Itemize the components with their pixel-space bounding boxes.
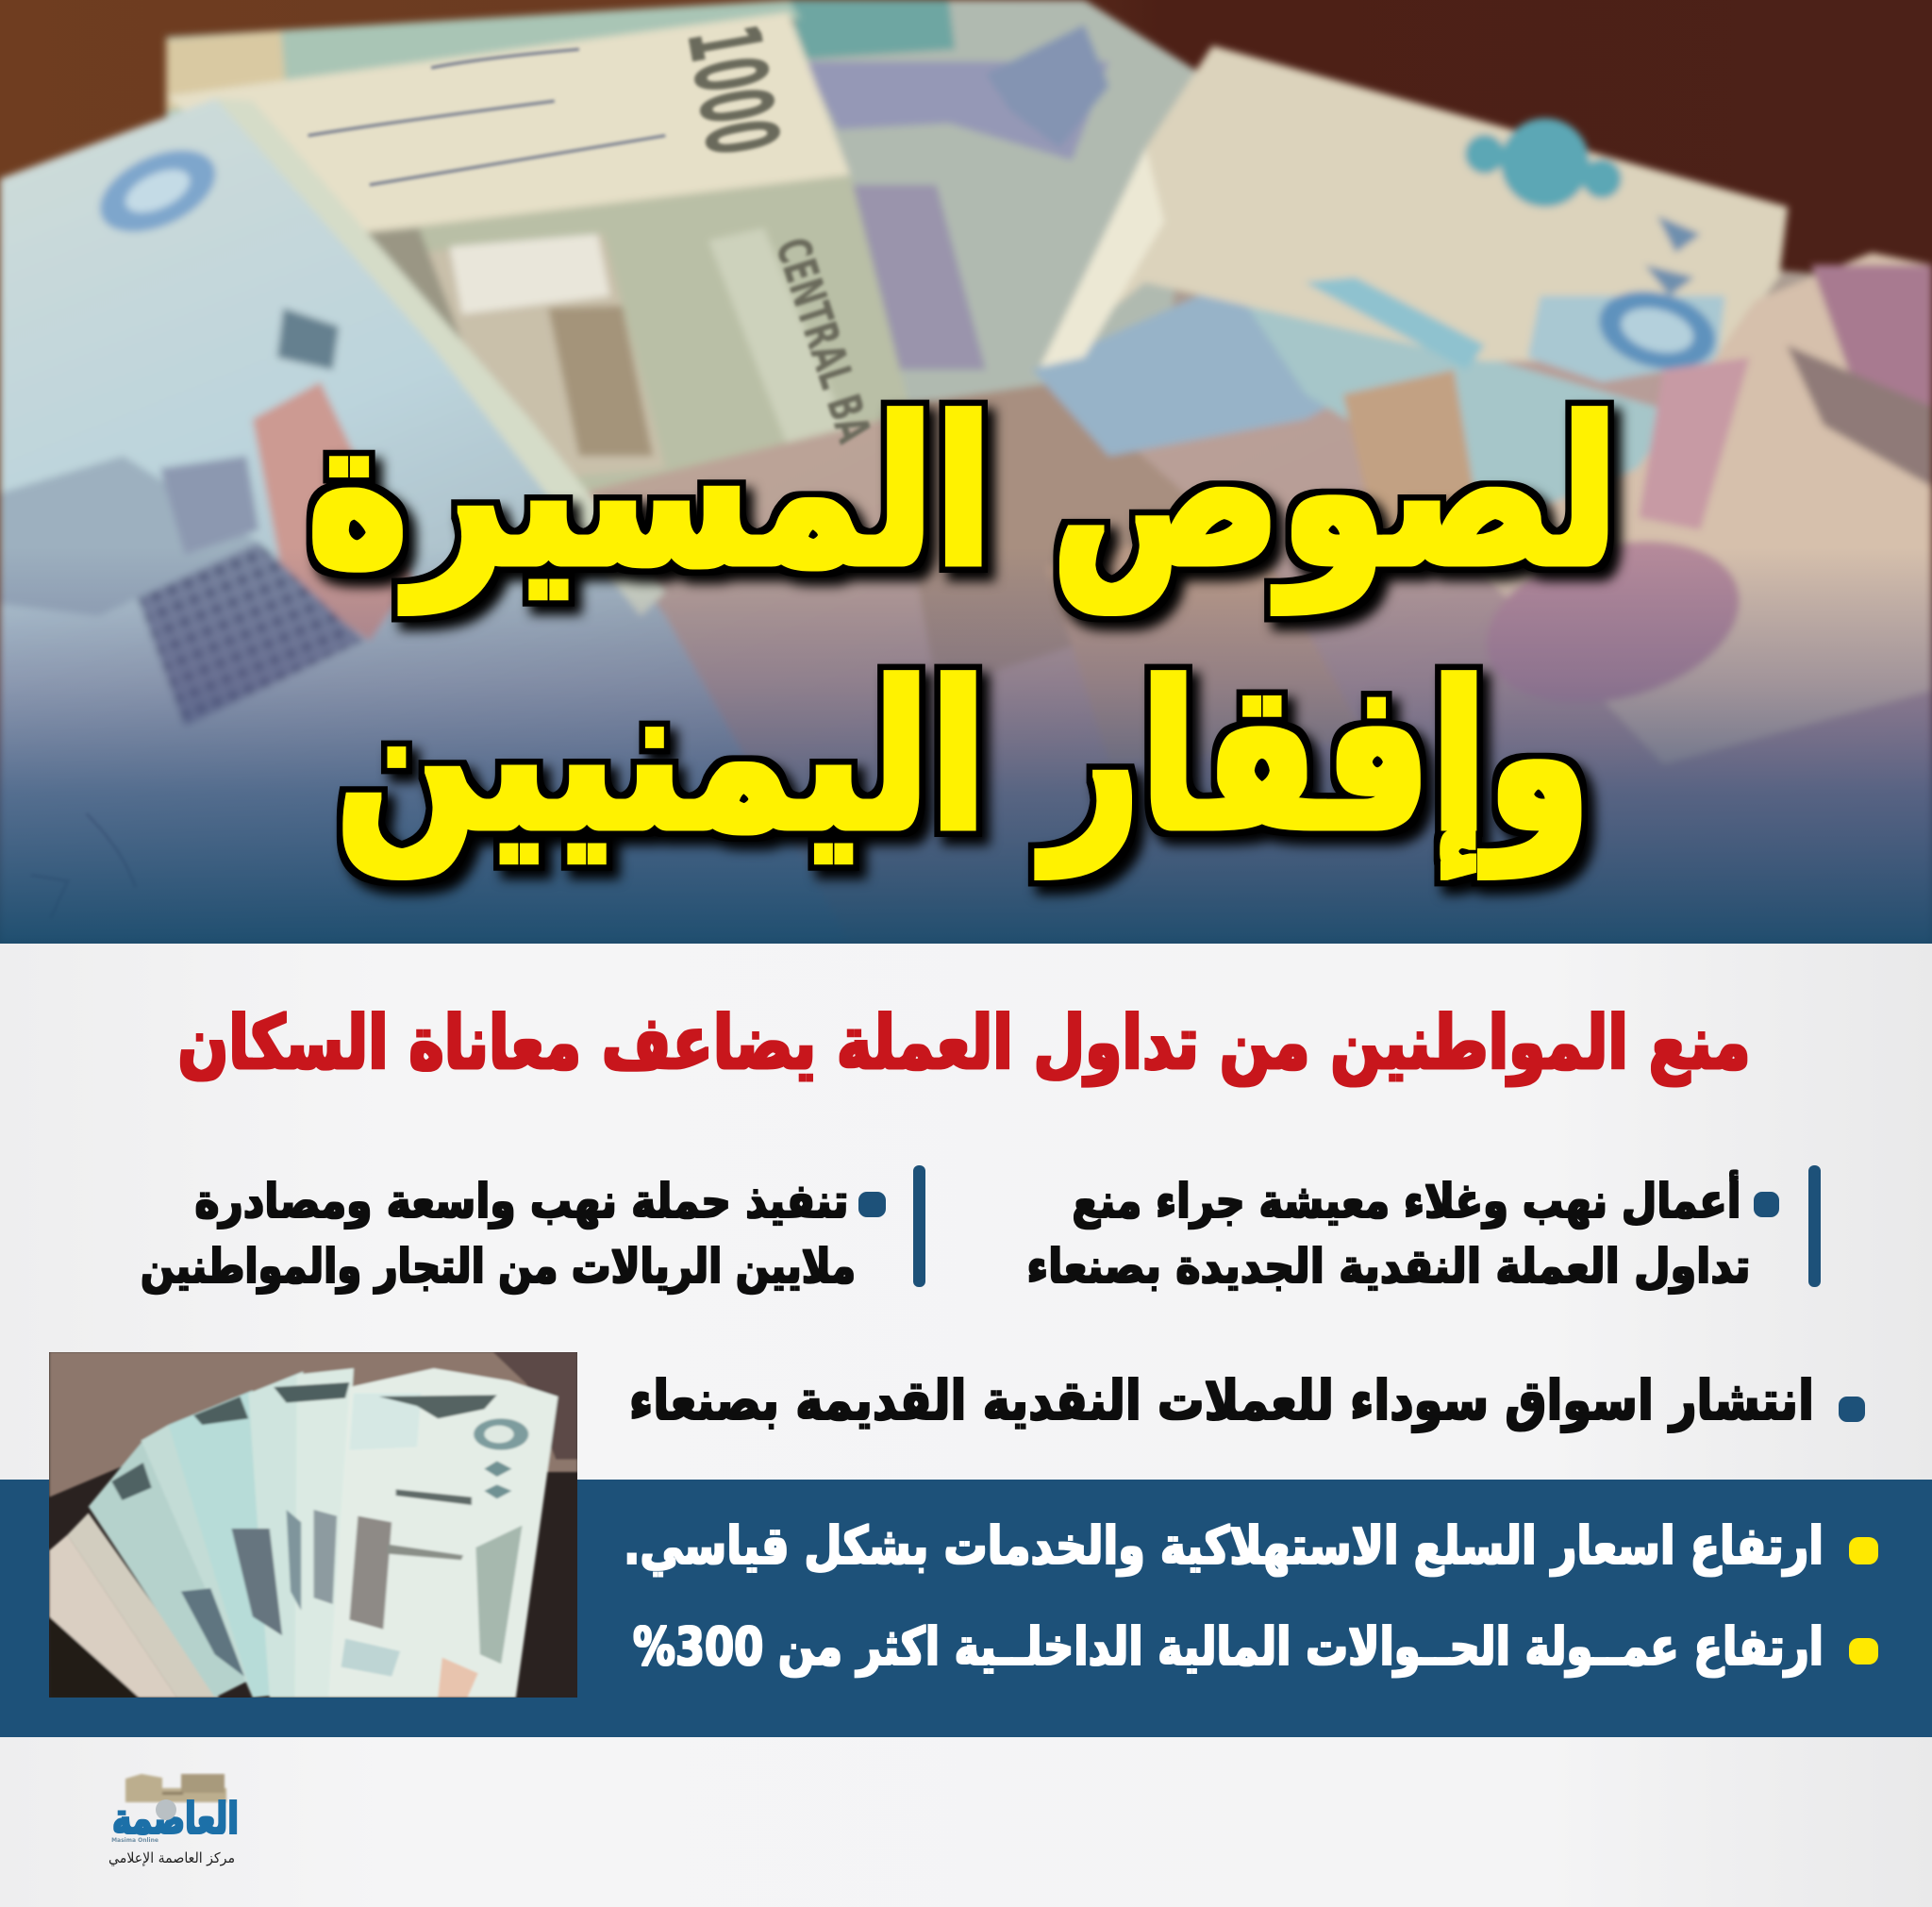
title [308, 375, 1619, 878]
blue band [0, 1480, 1932, 1737]
banknote: blue note [1034, 293, 1660, 527]
bullet item: looting and high cost of living [1026, 1165, 1821, 1295]
bullet: transfer fee [1849, 1638, 1878, 1664]
hero photo: banknotes [0, 0, 1932, 944]
title line 2: وإفقار اليمنيين [336, 639, 1591, 878]
title line 1: لصوص المسيرة [308, 375, 1619, 613]
handwriting on note [31, 49, 665, 918]
bullet item: confiscation campaign [141, 1165, 925, 1295]
bullet [1839, 1397, 1865, 1422]
banknote: top stripe [166, 0, 801, 121]
banknote: pink base [589, 362, 1660, 702]
banknote: left blue note [0, 98, 850, 943]
logo wordmark: العاصمة [112, 1793, 239, 1844]
bullet: prices [1849, 1537, 1878, 1564]
text line 2: ملايين الريالات من التجار والمواطنين [141, 1239, 856, 1295]
banknote: cream right note [1040, 45, 1788, 382]
divider bar [1808, 1165, 1821, 1287]
bullet [858, 1192, 886, 1217]
page background [0, 944, 1932, 1907]
logo: Al-Asima media centre [108, 1774, 239, 1867]
note value 1000: 1000 [664, 18, 799, 163]
text line 1: تنفيذ حملة نهب واسعة ومصادرة [194, 1174, 849, 1230]
icon: skyline [125, 1774, 226, 1802]
banknote printed figures [664, 18, 881, 449]
logo globe [156, 1799, 176, 1820]
bullet [1754, 1192, 1779, 1217]
photo: fan of new banknotes [49, 1352, 577, 1698]
banknote: right pink note [1454, 253, 1932, 764]
banknote: cream 1000 note [166, 12, 909, 518]
logo caption: مركز العاصمة الإعلامي [108, 1849, 235, 1867]
logo latin caption: Masima Online [111, 1837, 158, 1844]
text line 1: أعمال نهب وغلاء معيشة جراء منع [1072, 1170, 1741, 1230]
banknote: lavender centre [789, 0, 1201, 443]
bottom fade overlay [0, 0, 1932, 944]
text line 2: تداول العملة النقدية الجديدة بصنعاء [1026, 1239, 1751, 1295]
bullet item: black markets [629, 1368, 1865, 1433]
note label central bank: CENTRAL BA [765, 231, 881, 449]
divider bar [913, 1165, 925, 1287]
